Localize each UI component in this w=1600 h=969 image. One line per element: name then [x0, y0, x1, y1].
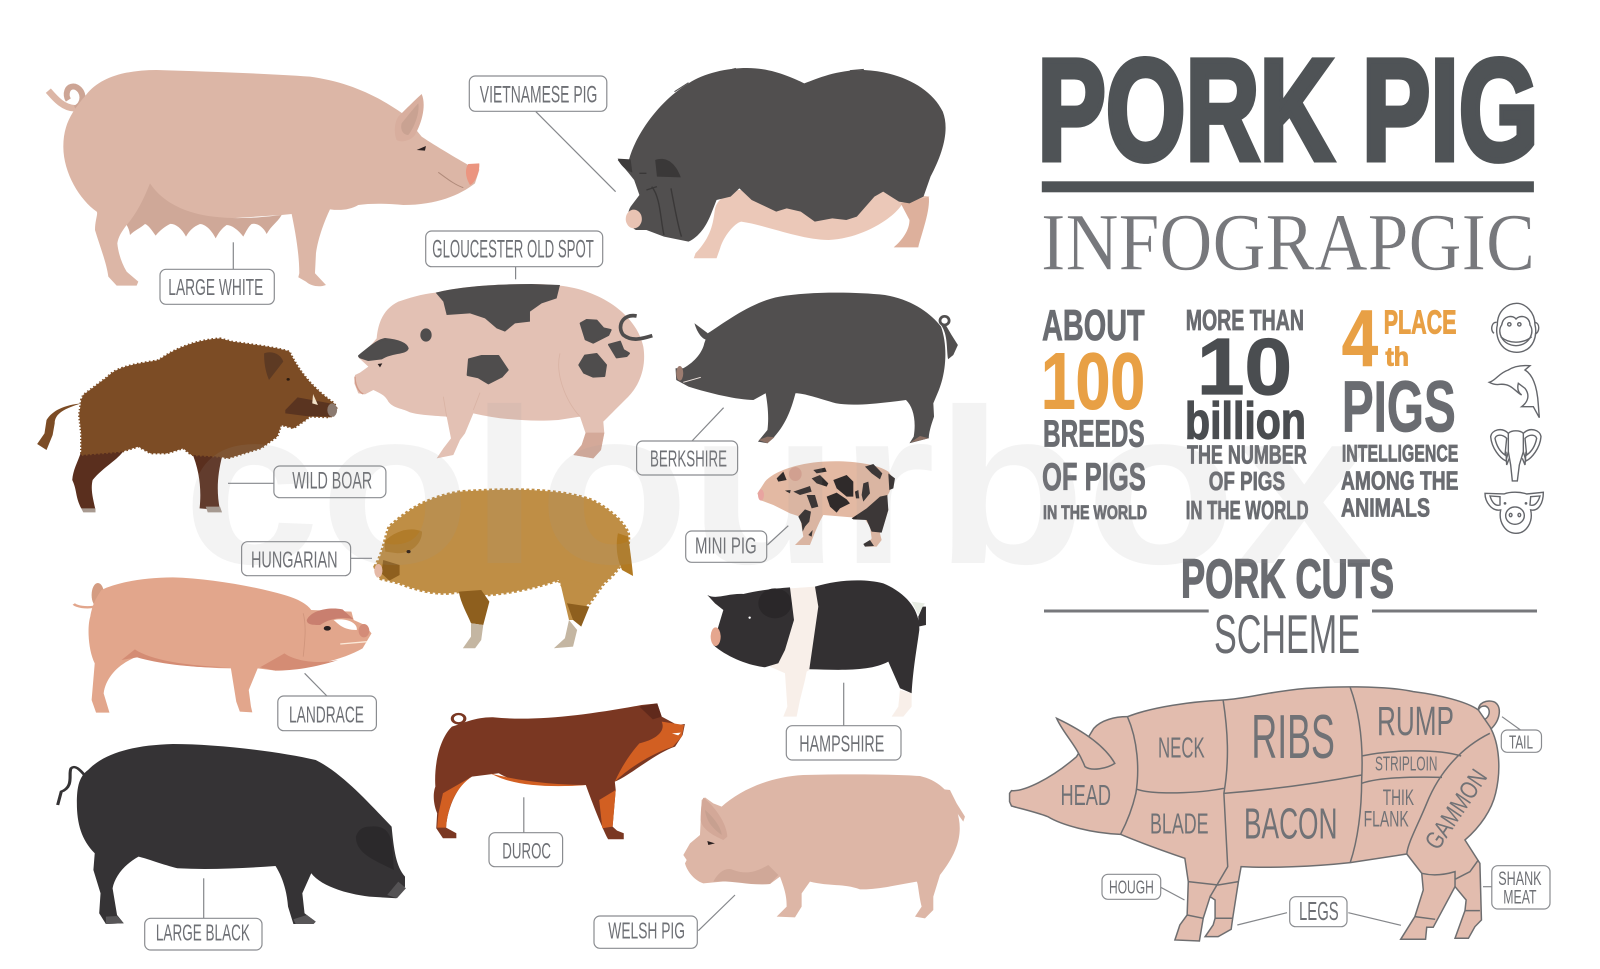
pork cuts diagram [1010, 687, 1550, 941]
stat: about 100 breeds: ABOUT [1042, 302, 1145, 350]
label: welsh pig: WELSH PIG [608, 918, 685, 944]
cut label: head: HEAD [1060, 780, 1111, 812]
label: duroc: DUROC [502, 838, 551, 863]
pig: large white [48, 70, 479, 286]
label: berkshire [637, 408, 738, 475]
stat: 4th place: PIGS [1342, 367, 1456, 448]
callout: legs [1237, 896, 1401, 927]
watermark: colourbox: colourbox [183, 363, 1373, 610]
label: landrace [278, 673, 376, 731]
label: large black: LARGE BLACK [156, 920, 250, 946]
callout: shank meat [1483, 866, 1550, 909]
pig: duroc [434, 703, 685, 839]
stat: about 100 breeds: IN THE WORLD [1043, 503, 1147, 524]
stat: about 100 breeds: 100 [1041, 336, 1145, 425]
cut label: ribs: RIBS [1251, 702, 1335, 772]
label: vietnamese pig [469, 76, 616, 192]
stat: 4th place: 4 [1342, 294, 1378, 383]
icon: dolphin [1489, 366, 1539, 418]
label: mini pig: MINI PIG [695, 532, 757, 558]
cut label: gammon: GAMMON [1420, 764, 1493, 855]
stat: more than 10 billion [1185, 305, 1309, 525]
stat: more than 10 billion: MORE THAN [1186, 305, 1304, 337]
cut label: thik flank: FLANK [1364, 807, 1409, 832]
heading: pork cuts: PORK CUTS [1181, 548, 1394, 610]
callout: shank meat: SHANK [1498, 869, 1542, 890]
stat: 4th place: th [1386, 342, 1409, 372]
label: landrace: LANDRACE [289, 702, 364, 728]
cut label: blade: BLADE [1150, 808, 1209, 840]
pig: welsh [683, 774, 965, 918]
label: hungarian: HUNGARIAN [251, 547, 338, 573]
cut label: bacon: BACON [1244, 800, 1338, 848]
pig: wild boar [37, 338, 337, 512]
label: duroc [489, 797, 563, 867]
stat: more than 10 billion: THE NUMBER [1187, 439, 1307, 469]
stat: 4th place: INTELLIGENCE [1342, 441, 1458, 468]
cut label: striploin: STRIPLOIN [1375, 754, 1437, 776]
stat: 4th place: ANIMALS [1341, 493, 1430, 523]
callout: legs: LEGS [1299, 896, 1339, 926]
label: wild boar [228, 466, 386, 498]
stat: about 100 breeds: BREEDS [1043, 414, 1145, 456]
icon: pig head [1485, 492, 1543, 533]
pig: hampshire [707, 580, 926, 717]
label: gloucester old spot: GLOUCESTER OLD SPOT [432, 235, 594, 263]
cut label: thik flank: THIK [1383, 785, 1414, 810]
label: hampshire: HAMPSHIRE [799, 731, 884, 757]
label: hampshire [786, 683, 901, 760]
pig: vietnamese [618, 68, 946, 258]
label: hungarian [242, 542, 372, 576]
icon: elephant [1491, 430, 1541, 481]
title underline bar [1042, 181, 1534, 192]
labels for breeds [145, 76, 901, 950]
callout: tail [1501, 717, 1542, 753]
pig: large black [58, 744, 406, 924]
subtitle: infograpgic: INFOGRAPGIC [1041, 196, 1535, 287]
stat: more than 10 billion: IN THE WORLD [1186, 495, 1309, 525]
heading: scheme: SCHEME [1214, 603, 1360, 665]
pig: landrace [74, 577, 372, 713]
callout: shank meat: MEAT [1503, 887, 1537, 908]
cut pig outline and divisions [1010, 687, 1499, 941]
stat: about 100 breeds: OF PIGS [1042, 456, 1146, 499]
pig: gloucester old spot [354, 284, 652, 458]
pig: hungarian [374, 490, 633, 648]
stat: 4th place: AMONG THE [1341, 465, 1458, 495]
stat: 4th place: PLACE [1384, 304, 1456, 341]
callout: tail: TAIL [1509, 732, 1533, 753]
callout: hough: HOUGH [1109, 877, 1154, 897]
stat: more than 10 billion: billion [1185, 392, 1306, 450]
pig: berkshire [676, 293, 958, 443]
stat: about 100 breeds [1041, 302, 1147, 524]
label: berkshire: BERKSHIRE [650, 446, 727, 472]
stat: more than 10 billion: OF PIGS [1209, 466, 1285, 496]
label: wild boar: WILD BOAR [292, 467, 372, 494]
divider right [1372, 610, 1537, 612]
divider left [1044, 610, 1209, 612]
label: large black [145, 878, 262, 950]
cut label: rump: RUMP [1377, 698, 1454, 744]
label: mini pig [686, 526, 788, 562]
cut label: neck: NECK [1158, 732, 1205, 764]
stat: more than 10 billion: 10 [1197, 322, 1292, 411]
label: large white [160, 242, 274, 304]
cut label: thik flank [1364, 785, 1414, 832]
icons: intelligent animals [1485, 303, 1543, 533]
stat: 4th place [1341, 294, 1458, 523]
label: welsh pig [594, 895, 735, 948]
label: large white: LARGE WHITE [168, 274, 263, 300]
label: vietnamese pig: VIETNAMESE PIG [480, 81, 597, 108]
label: gloucester old spot [426, 231, 603, 279]
callout: hough [1102, 874, 1184, 900]
pig: mini pig [757, 461, 895, 547]
icon: monkey [1492, 303, 1539, 352]
